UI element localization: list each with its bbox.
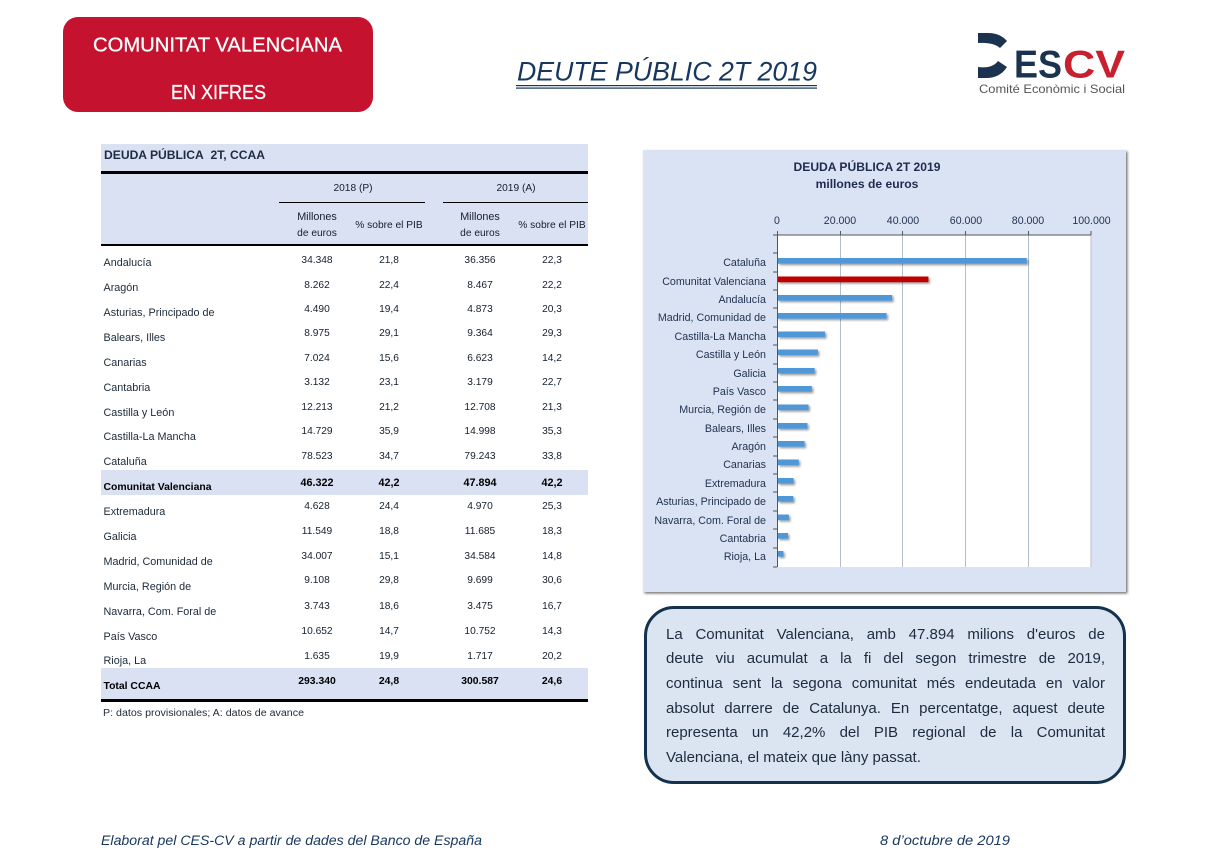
table values: 12.708 — [464, 402, 496, 413]
table values: 15,6 — [379, 353, 399, 364]
x axis labels: 100.000 — [1072, 215, 1111, 227]
category labels — [654, 257, 766, 563]
table values: 36.356 — [464, 255, 496, 266]
x axis labels: 20.000 — [824, 215, 856, 227]
footer source: Elaborat pel CES-CV a partir de dades del Banco de España — [101, 833, 483, 848]
table values: 35,3 — [542, 426, 562, 437]
table row labels: Balears, Illes — [104, 332, 166, 344]
table values: 14,2 — [542, 353, 562, 364]
table values: 35,9 — [379, 426, 399, 437]
table values: 79.243 — [464, 451, 496, 462]
table values: 4.490 — [304, 304, 330, 315]
table values: 29,1 — [379, 328, 399, 339]
table row labels: Extremadura — [104, 506, 165, 518]
table row labels: Cataluña — [104, 456, 147, 468]
category labels: Castilla-La Mancha — [675, 331, 766, 343]
table values: 24,4 — [379, 501, 399, 512]
table values: 23,1 — [379, 377, 399, 388]
callout text box: Valenciana, el mateix que làny passat. — [666, 749, 921, 766]
table values: 25,3 — [542, 501, 562, 512]
table row labels: Canarias — [104, 357, 147, 369]
category labels: Andalucía — [718, 294, 766, 306]
table column header: % sobre el PIB — [355, 220, 423, 231]
table values: 16,7 — [542, 601, 562, 612]
table column header — [101, 171, 588, 246]
table values: 24,8 — [379, 676, 399, 687]
table values: 1.635 — [304, 651, 330, 662]
category labels: Asturias, Principado de — [656, 496, 766, 508]
table values: 42,2 — [378, 477, 400, 489]
callout text box: La Comunitat Valenciana, amb 47.894 milions d'euros de — [666, 626, 1105, 643]
footnote: P: datos provisionales; A: datos de avance — [103, 708, 304, 719]
table values: 22,2 — [542, 280, 562, 291]
table values: 46.322 — [300, 477, 334, 489]
table values: 20,3 — [542, 304, 562, 315]
header badge: COMUNITAT VALENCIANA — [93, 33, 342, 56]
table values: 3.179 — [467, 377, 493, 388]
category labels: Canarias — [723, 459, 766, 471]
table values: 10.652 — [301, 626, 333, 637]
table title band: DEUDA PÚBLICA 2T, CCAA — [104, 147, 265, 162]
logo: CES-CV: CV — [1063, 44, 1125, 86]
table values: 3.475 — [467, 601, 493, 612]
category labels: Navarra, Com. Foral de — [654, 515, 766, 527]
table values: 21,2 — [379, 402, 399, 413]
x axis labels: 80.000 — [1012, 215, 1044, 227]
table values: 21,3 — [542, 402, 562, 413]
table values: 9.364 — [467, 328, 493, 339]
header badge — [63, 17, 373, 112]
table row labels: Asturias, Principado de — [104, 307, 215, 319]
table values: 19,4 — [379, 304, 399, 315]
table values: 12.213 — [301, 402, 333, 413]
table values — [298, 255, 563, 687]
chart title: millones de euros — [816, 177, 919, 191]
table values: 20,2 — [542, 651, 562, 662]
table values: 293.340 — [298, 676, 336, 687]
table values: 8.262 — [304, 280, 330, 291]
callout text box: representa un 42,2% del PIB regional de la Comunitat — [666, 724, 1105, 741]
table values: 34,7 — [379, 451, 399, 462]
table column header: de euros — [297, 228, 337, 239]
category labels: País Vasco — [713, 386, 766, 398]
footer date: 8 d’octubre de 2019 — [880, 833, 1011, 848]
callout text box: deute viu acumulat a la fi del segon trimestre de 2019, — [666, 650, 1105, 667]
table values: 18,3 — [542, 526, 562, 537]
table row labels: Comunitat Valenciana — [104, 482, 212, 493]
table values: 300.587 — [461, 676, 499, 687]
table values: 19,9 — [379, 651, 399, 662]
table values: 29,8 — [379, 575, 399, 586]
table column header: 2018 (P) — [333, 183, 373, 194]
table values: 14.729 — [301, 426, 333, 437]
x axis labels — [774, 215, 1111, 227]
table values: 8.975 — [304, 328, 330, 339]
table values: 14,7 — [379, 626, 399, 637]
table values: 4.873 — [467, 304, 493, 315]
table values: 33,8 — [542, 451, 562, 462]
category labels: Cantabria — [720, 533, 766, 545]
table row labels — [104, 257, 216, 692]
table values: 42,2 — [541, 477, 563, 489]
table values: 15,1 — [379, 551, 399, 562]
chart panel — [643, 150, 1126, 592]
table values: 34.584 — [464, 551, 496, 562]
category labels: Rioja, La — [724, 551, 766, 563]
table values: 14,8 — [542, 551, 562, 562]
callout text box: absolut darrere de Catalunya. En percentatge, aquest deute — [666, 700, 1105, 717]
logo: CES-CV — [978, 33, 1125, 96]
category labels: Castilla y León — [696, 349, 766, 361]
table values: 78.523 — [301, 451, 333, 462]
table values: 3.743 — [304, 601, 330, 612]
table: deuda pública por CCAA — [101, 144, 588, 719]
category labels: Galicia — [733, 368, 766, 380]
callout text box: continua sent la segona comunitat més endeutada en valor — [666, 675, 1105, 692]
total row background — [101, 668, 588, 699]
table values: 8.467 — [467, 280, 493, 291]
highlighted row background — [101, 470, 588, 495]
table values: 6.623 — [467, 353, 493, 364]
table column header: de euros — [460, 228, 500, 239]
category labels: Comunitat Valenciana — [662, 276, 766, 288]
table row labels: Madrid, Comunidad de — [104, 556, 213, 568]
table values: 1.717 — [467, 651, 493, 662]
x axis labels: 60.000 — [950, 215, 982, 227]
table values: 9.699 — [467, 575, 493, 586]
table values: 4.970 — [467, 501, 493, 512]
table row labels: Murcia, Región de — [104, 581, 191, 593]
table row labels: Andalucía — [104, 257, 152, 269]
x axis labels: 0 — [774, 215, 780, 227]
table row labels: Total CCAA — [104, 681, 161, 692]
chart title — [794, 159, 941, 191]
table values: 47.894 — [463, 477, 497, 489]
category labels: Aragón — [732, 441, 766, 453]
logo: CES-CV: Comité Econòmic i Social — [979, 82, 1125, 96]
table row labels: Cantabria — [104, 382, 150, 394]
chart title: DEUDA PÚBLICA 2T 2019 — [794, 159, 941, 174]
table row labels: Aragón — [104, 282, 138, 294]
table row labels: Navarra, Com. Foral de — [104, 606, 216, 618]
table column header: Millones — [297, 211, 337, 223]
table title band — [101, 144, 588, 172]
table row labels: Galicia — [104, 531, 137, 543]
table column header: 2019 (A) — [496, 183, 536, 194]
category labels: Balears, Illes — [705, 423, 766, 435]
table values: 14,3 — [542, 626, 562, 637]
category labels: Madrid, Comunidad de — [658, 312, 766, 324]
table values: 14.998 — [464, 426, 496, 437]
bar chart: deuda pública 2T 2019 — [643, 150, 1126, 592]
bars — [778, 258, 1027, 557]
table row labels: Castilla-La Mancha — [104, 431, 196, 443]
table values: 21,8 — [379, 255, 399, 266]
table values: 11.685 — [465, 526, 496, 537]
logo: CES-CV: ES — [1014, 44, 1062, 86]
category labels: Extremadura — [705, 478, 766, 490]
category labels: Murcia, Región de — [679, 404, 766, 416]
plot area — [778, 235, 1091, 567]
x axis labels: 40.000 — [887, 215, 919, 227]
table row labels: Rioja, La — [104, 655, 146, 667]
table values: 24,6 — [542, 676, 562, 687]
table values: 3.132 — [304, 377, 330, 388]
table values: 7.024 — [304, 353, 330, 364]
callout text box — [644, 606, 1126, 784]
table values: 30,6 — [542, 575, 562, 586]
table values: 34.007 — [301, 551, 333, 562]
table row labels: Castilla y León — [104, 407, 174, 419]
category labels: Cataluña — [723, 257, 766, 269]
table column header: Millones — [460, 211, 500, 223]
table values: 34.348 — [301, 255, 333, 266]
table values: 22,7 — [542, 377, 562, 388]
title: DEUTE PÚBLIC 2T 2019 — [517, 56, 817, 86]
table row labels: País Vasco — [104, 631, 157, 643]
table values: 9.108 — [304, 575, 330, 586]
table values: 10.752 — [464, 626, 496, 637]
table values: 4.628 — [304, 501, 330, 512]
table values: 22,4 — [379, 280, 399, 291]
table values: 22,3 — [542, 255, 562, 266]
table values: 18,6 — [379, 601, 399, 612]
header badge: EN XIFRES — [171, 81, 266, 104]
table values: 11.549 — [302, 526, 333, 537]
table values: 18,8 — [379, 526, 399, 537]
table values: 29,3 — [542, 328, 562, 339]
table column header: % sobre el PIB — [518, 220, 586, 231]
